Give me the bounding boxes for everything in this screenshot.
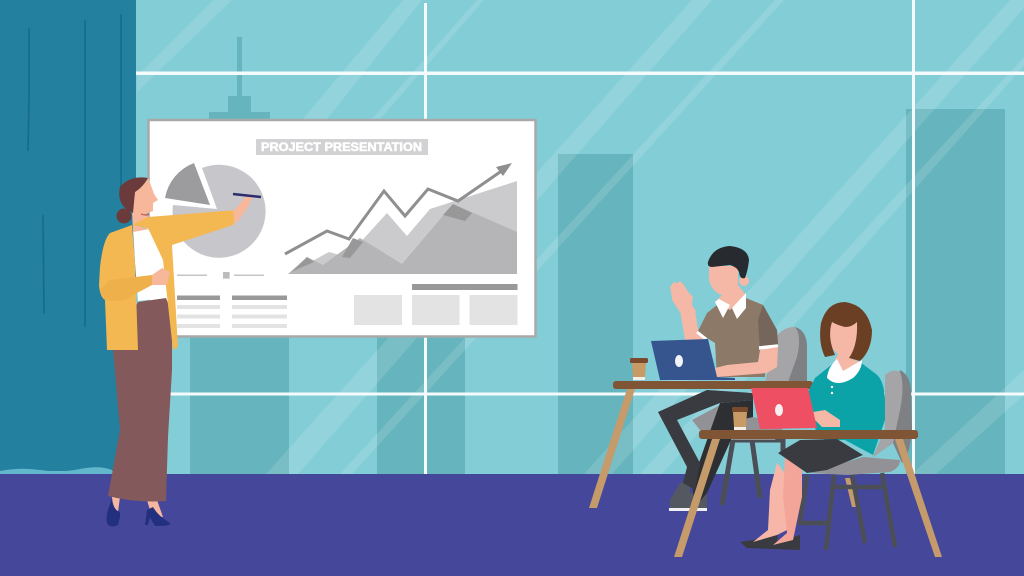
panel: presentation board [148, 120, 536, 336]
trend line arrow [285, 163, 512, 254]
woman's hands [813, 410, 840, 427]
coffee cup one [630, 358, 648, 380]
presenter woman [99, 177, 261, 526]
man's chair [692, 327, 807, 505]
window frame bars [136, 0, 1024, 474]
presenter skirt [108, 298, 172, 501]
woman's legs [753, 457, 802, 545]
area chart [288, 181, 517, 274]
man's raised arm and hand [671, 282, 705, 345]
city skyline silhouettes [190, 37, 1005, 474]
seated woman [740, 302, 885, 550]
red laptop [751, 388, 817, 429]
man's shirt [697, 298, 778, 377]
man's forearm [715, 347, 778, 377]
heading: project presentation [256, 139, 428, 155]
glass reflections [137, 0, 1024, 474]
woman's head [820, 302, 872, 394]
presenter jacket [99, 210, 237, 350]
front table one [589, 381, 857, 508]
man [658, 246, 778, 511]
blue laptop [651, 339, 735, 380]
woman's skirt [778, 439, 863, 473]
man's shoes [669, 480, 707, 511]
heading: project presentation: PROJECT PRESENTATION [261, 142, 422, 154]
summary boxes [354, 284, 518, 325]
floor [0, 474, 1024, 576]
man's head [708, 246, 749, 319]
man's trousers [658, 390, 753, 507]
presenter shoes and feet [106, 497, 170, 526]
woman's teal top [808, 362, 885, 455]
marker pen [233, 194, 261, 197]
data table [177, 296, 287, 328]
coffee cup two [732, 407, 748, 430]
pie chart [165, 163, 266, 258]
presenter head [116, 177, 158, 232]
presenter hands [152, 195, 253, 285]
presenter blouse [133, 228, 166, 301]
front table two [674, 430, 942, 557]
curtain [0, 0, 136, 475]
woman's chair [800, 370, 912, 550]
pie chart legend [177, 272, 264, 279]
woman's shoes [740, 533, 800, 550]
